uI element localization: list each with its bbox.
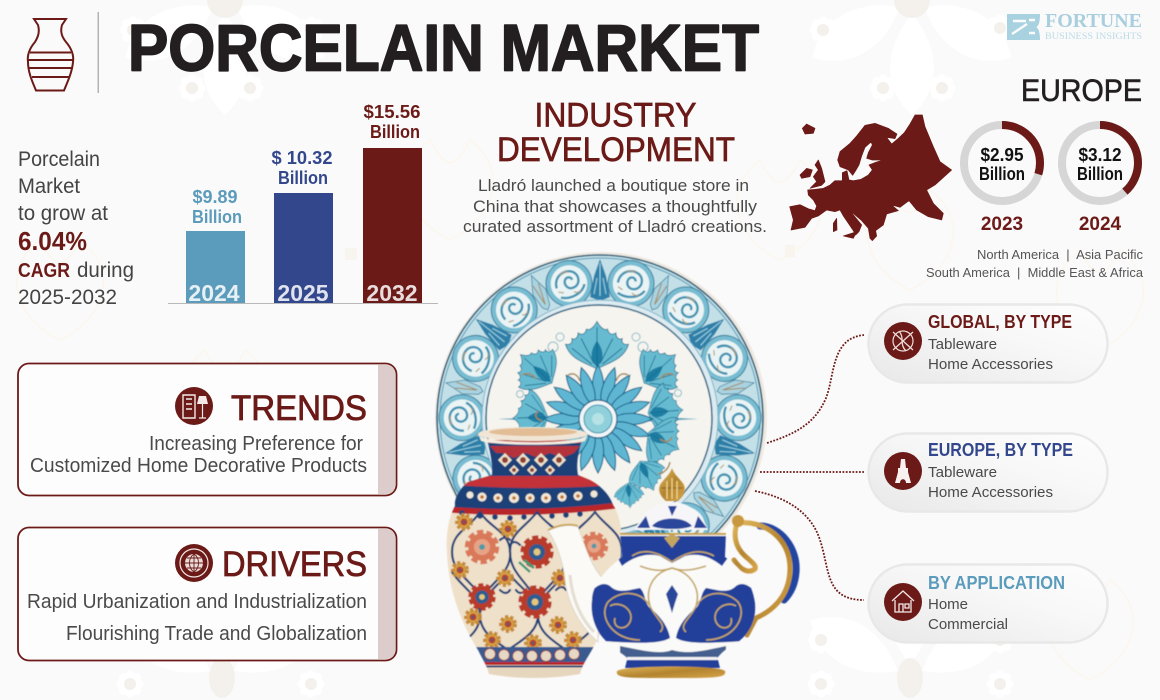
icon: vase [28,19,73,90]
title: PORCELAIN MARKET [128,10,759,84]
heading: industry development: DEVELOPMENT [497,131,735,169]
donut: 2023: Billion [979,164,1025,184]
vase shoulder band [463,475,600,489]
icon: house [884,583,922,621]
vase body lattice [452,512,622,650]
text: global by type: Tableware [928,336,997,353]
text: europe by type [928,440,1073,501]
bar: 2024: $9.89 [192,187,238,207]
growth statement [18,148,134,309]
teapot lid [635,468,708,530]
heading: industry development: INDUSTRY [534,96,696,134]
vase neck band [488,442,582,477]
other regions list: South America | Middle East & Africa [926,265,1144,280]
text: global by type [928,312,1072,373]
text: europe by type: Tableware [928,464,997,481]
dotted connector lines [755,335,864,600]
bar: 2025: 2025 [277,280,329,306]
icon: home decor [175,387,213,425]
map of Europe [790,115,952,241]
icon: global [884,322,922,360]
text: global by type: GLOBAL, BY TYPE [928,312,1072,332]
donut: 2024 [1062,125,1138,235]
teapot lid knob [659,468,685,501]
teapot foot [617,657,725,678]
text: by application [928,573,1065,633]
bar: 2032: Billion [370,122,420,142]
text: trends detail [30,433,367,477]
illustration: blue and gold teapot [548,468,796,678]
donut: 2024: $3.12 [1078,145,1122,165]
panel: europe by type [868,434,1108,512]
bar: 2024: Billion [192,207,242,227]
bar: 2032 [363,102,422,306]
text: trends detail: Customized Home Decorative Products [30,455,367,477]
header divider [98,12,99,93]
donut: 2023 [964,125,1040,235]
panel: trends [18,364,396,496]
other regions list: North America | Asia Pacific [977,247,1143,262]
text: drivers detail: Rapid Urbanization and Industrialization [27,591,367,613]
bar: 2032: $15.56 [364,102,420,122]
bar: 2024: 2024 [188,280,240,306]
vase rim [478,427,588,445]
icon: globe [175,544,213,582]
bar chart [168,102,438,306]
growth statement: Market [18,175,80,198]
heading: industry development [497,96,735,169]
logo: Fortune Business Insights: FORTUNE [1045,11,1142,32]
text: industry development description [463,176,767,236]
bar: 2024 [186,187,245,306]
text: drivers detail [27,591,367,645]
bar: 2032: 2032 [366,280,418,306]
bar: 2025: $ 10.32 [272,148,332,168]
teapot body [585,530,761,660]
text: drivers detail: Flourishing Trade and Globalization [66,623,367,645]
growth statement: during [77,259,134,282]
donut: 2023: $2.95 [980,145,1024,165]
text: by application: BY APPLICATION [928,573,1065,593]
other regions list [926,247,1144,280]
plate centre motif [498,322,698,509]
growth statement: 2025-2032 [18,286,117,309]
panel: global by type [868,304,1108,382]
logo: Fortune Business Insights [1007,11,1142,42]
vase foot band [476,646,594,663]
text: trends detail: Increasing Preference for [149,433,363,455]
text: global by type: Home Accessories [928,356,1053,373]
teapot spout [548,525,604,642]
bar: 2025 [272,148,333,306]
plate rim scrollwork [425,256,773,596]
logo: Fortune Business Insights: BUSINESS INSIGHTS [1045,32,1142,42]
teapot handle [734,523,796,635]
text: by application: Home [928,596,968,613]
growth statement: 6.04% [18,226,87,256]
text: industry development description: curated assortment of Lladró creations. [463,217,767,236]
text: by application: Commercial [928,616,1008,633]
growth statement: Porcelain [18,148,100,171]
text: industry development description: China that showcases a thoughtfully [473,197,758,216]
vase flowers [453,515,605,650]
growth statement: to grow at [18,202,108,225]
text: europe by type: Home Accessories [928,484,1053,501]
panel: drivers [18,528,396,660]
bar: 2025: Billion [278,168,328,188]
donut: 2024: Billion [1077,164,1123,184]
donut: 2024: 2024 [1079,214,1122,235]
icon: Eiffel tower [884,452,922,490]
heading: trends: TRENDS [231,389,367,428]
illustration: floral vase [440,427,630,682]
growth statement: CAGR [18,260,70,282]
donut: 2023: 2023 [981,214,1023,235]
heading: Europe: EUROPE [1021,72,1142,108]
text: industry development description: Lladró launched a boutique store in [478,176,749,195]
text: europe by type: EUROPE, BY TYPE [928,440,1073,460]
illustration: painted plate [425,252,773,596]
panel: by application [868,564,1108,642]
heading: drivers: DRIVERS [222,545,367,584]
